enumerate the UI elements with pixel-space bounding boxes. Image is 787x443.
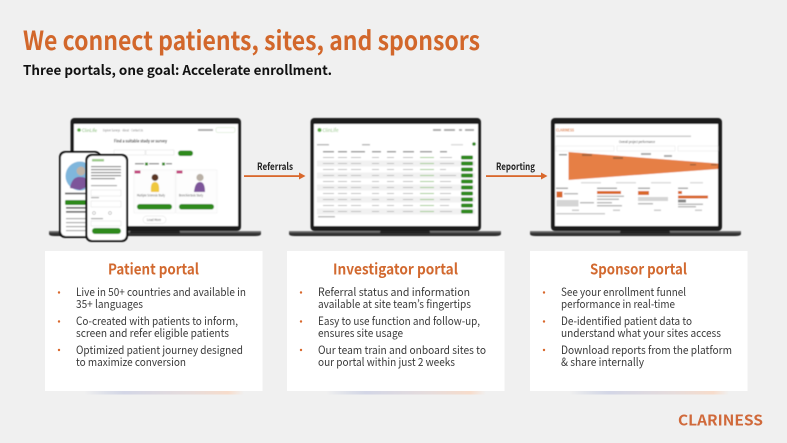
arrow: referrals: Referrals: [257, 158, 293, 173]
arrow: referrals: [244, 158, 306, 180]
arrow: reporting: Reporting: [496, 158, 535, 173]
funnel chart: [568, 152, 718, 180]
icon: phone, front form: [86, 154, 128, 242]
bullets: sponsor portal: [543, 284, 732, 370]
laptop: sponsor portal dashboard: Overall project performance: [619, 139, 655, 144]
bullets: sponsor portal: & share internally: [561, 354, 644, 370]
subtitle: Three portals, one goal: Accelerate enrollment.: [23, 59, 332, 79]
study card: bronchiectasis: Bronchiectasis Study: [179, 194, 203, 198]
title: We connect patients, sites, and sponsors: [23, 21, 480, 58]
panel: patient portal: [45, 251, 262, 394]
bullets: sponsor portal: performance in real-time: [561, 296, 675, 312]
bullets: patient portal: 35+ languages: [76, 296, 143, 312]
laptop: sponsor portal dashboard: [530, 118, 741, 236]
heading: sponsor portal: Sponsor portal: [590, 258, 687, 280]
panel: sponsor portal: [530, 251, 748, 394]
bullets: sponsor portal: understand what your sites access: [561, 325, 721, 341]
laptop: patient portal screens: Load More: [147, 218, 161, 222]
laptop: investigator portal table: [289, 118, 501, 236]
laptop: patient portal screens: [49, 118, 261, 236]
arrow: reporting: [486, 158, 548, 180]
bullets: patient portal: [58, 284, 246, 370]
panel: investigator portal: [287, 251, 504, 394]
bullets: sponsor portal: De-identified patient data to: [561, 313, 692, 329]
bullets: patient portal: screen and refer eligible patients: [76, 325, 229, 341]
bullets: sponsor portal: See your enrollment funnel: [561, 284, 686, 300]
laptop: sponsor portal dashboard: CLARINESS: [556, 128, 574, 134]
laptop: patient portal screens: Find a suitable study or survey: [114, 138, 167, 144]
mini bar charts: [556, 188, 708, 208]
logo: Clariness: CLARINESS: [678, 410, 763, 430]
bullets: investigator portal: Our team train and onboard sites to: [318, 342, 486, 358]
bullets: investigator portal: available at site team’s fingertips: [318, 296, 471, 312]
bullets: patient portal: Optimized patient journey designed: [76, 342, 243, 358]
bullets: investigator portal: our portal within just 2 weeks: [318, 354, 455, 370]
study card: bronchiectasis: [176, 170, 217, 213]
heading: patient portal: Patient portal: [108, 258, 199, 280]
bullets: investigator portal: Referral status and information: [318, 284, 470, 300]
bullets: patient portal: Live in 50+ countries and available in: [76, 284, 246, 300]
bullets: patient portal: Co-created with patients to inform,: [76, 313, 238, 329]
table header: [323, 151, 447, 152]
icon: phone, back: [59, 151, 101, 238]
bullets: patient portal: to maximize conversion: [76, 354, 186, 370]
laptop: investigator portal table: ClinLife: [322, 127, 339, 134]
table rows: [317, 156, 475, 214]
heading: investigator portal: Investigator portal: [333, 258, 458, 280]
bullets: investigator portal: [300, 284, 486, 370]
bullets: investigator portal: ensures site usage: [318, 325, 403, 341]
bullets: investigator portal: Easy to use function and follow-up,: [318, 313, 480, 329]
study card: multiple sclerosis: [134, 170, 175, 213]
laptop: patient portal screens: ClinLife: [82, 127, 97, 134]
laptop: patient portal screens: Explore Surveys · About · Contact Us: [103, 128, 143, 132]
bullets: sponsor portal: Download reports from the platform: [561, 342, 732, 358]
study card: multiple sclerosis: Multiple Sclerosis Study: [137, 194, 165, 198]
